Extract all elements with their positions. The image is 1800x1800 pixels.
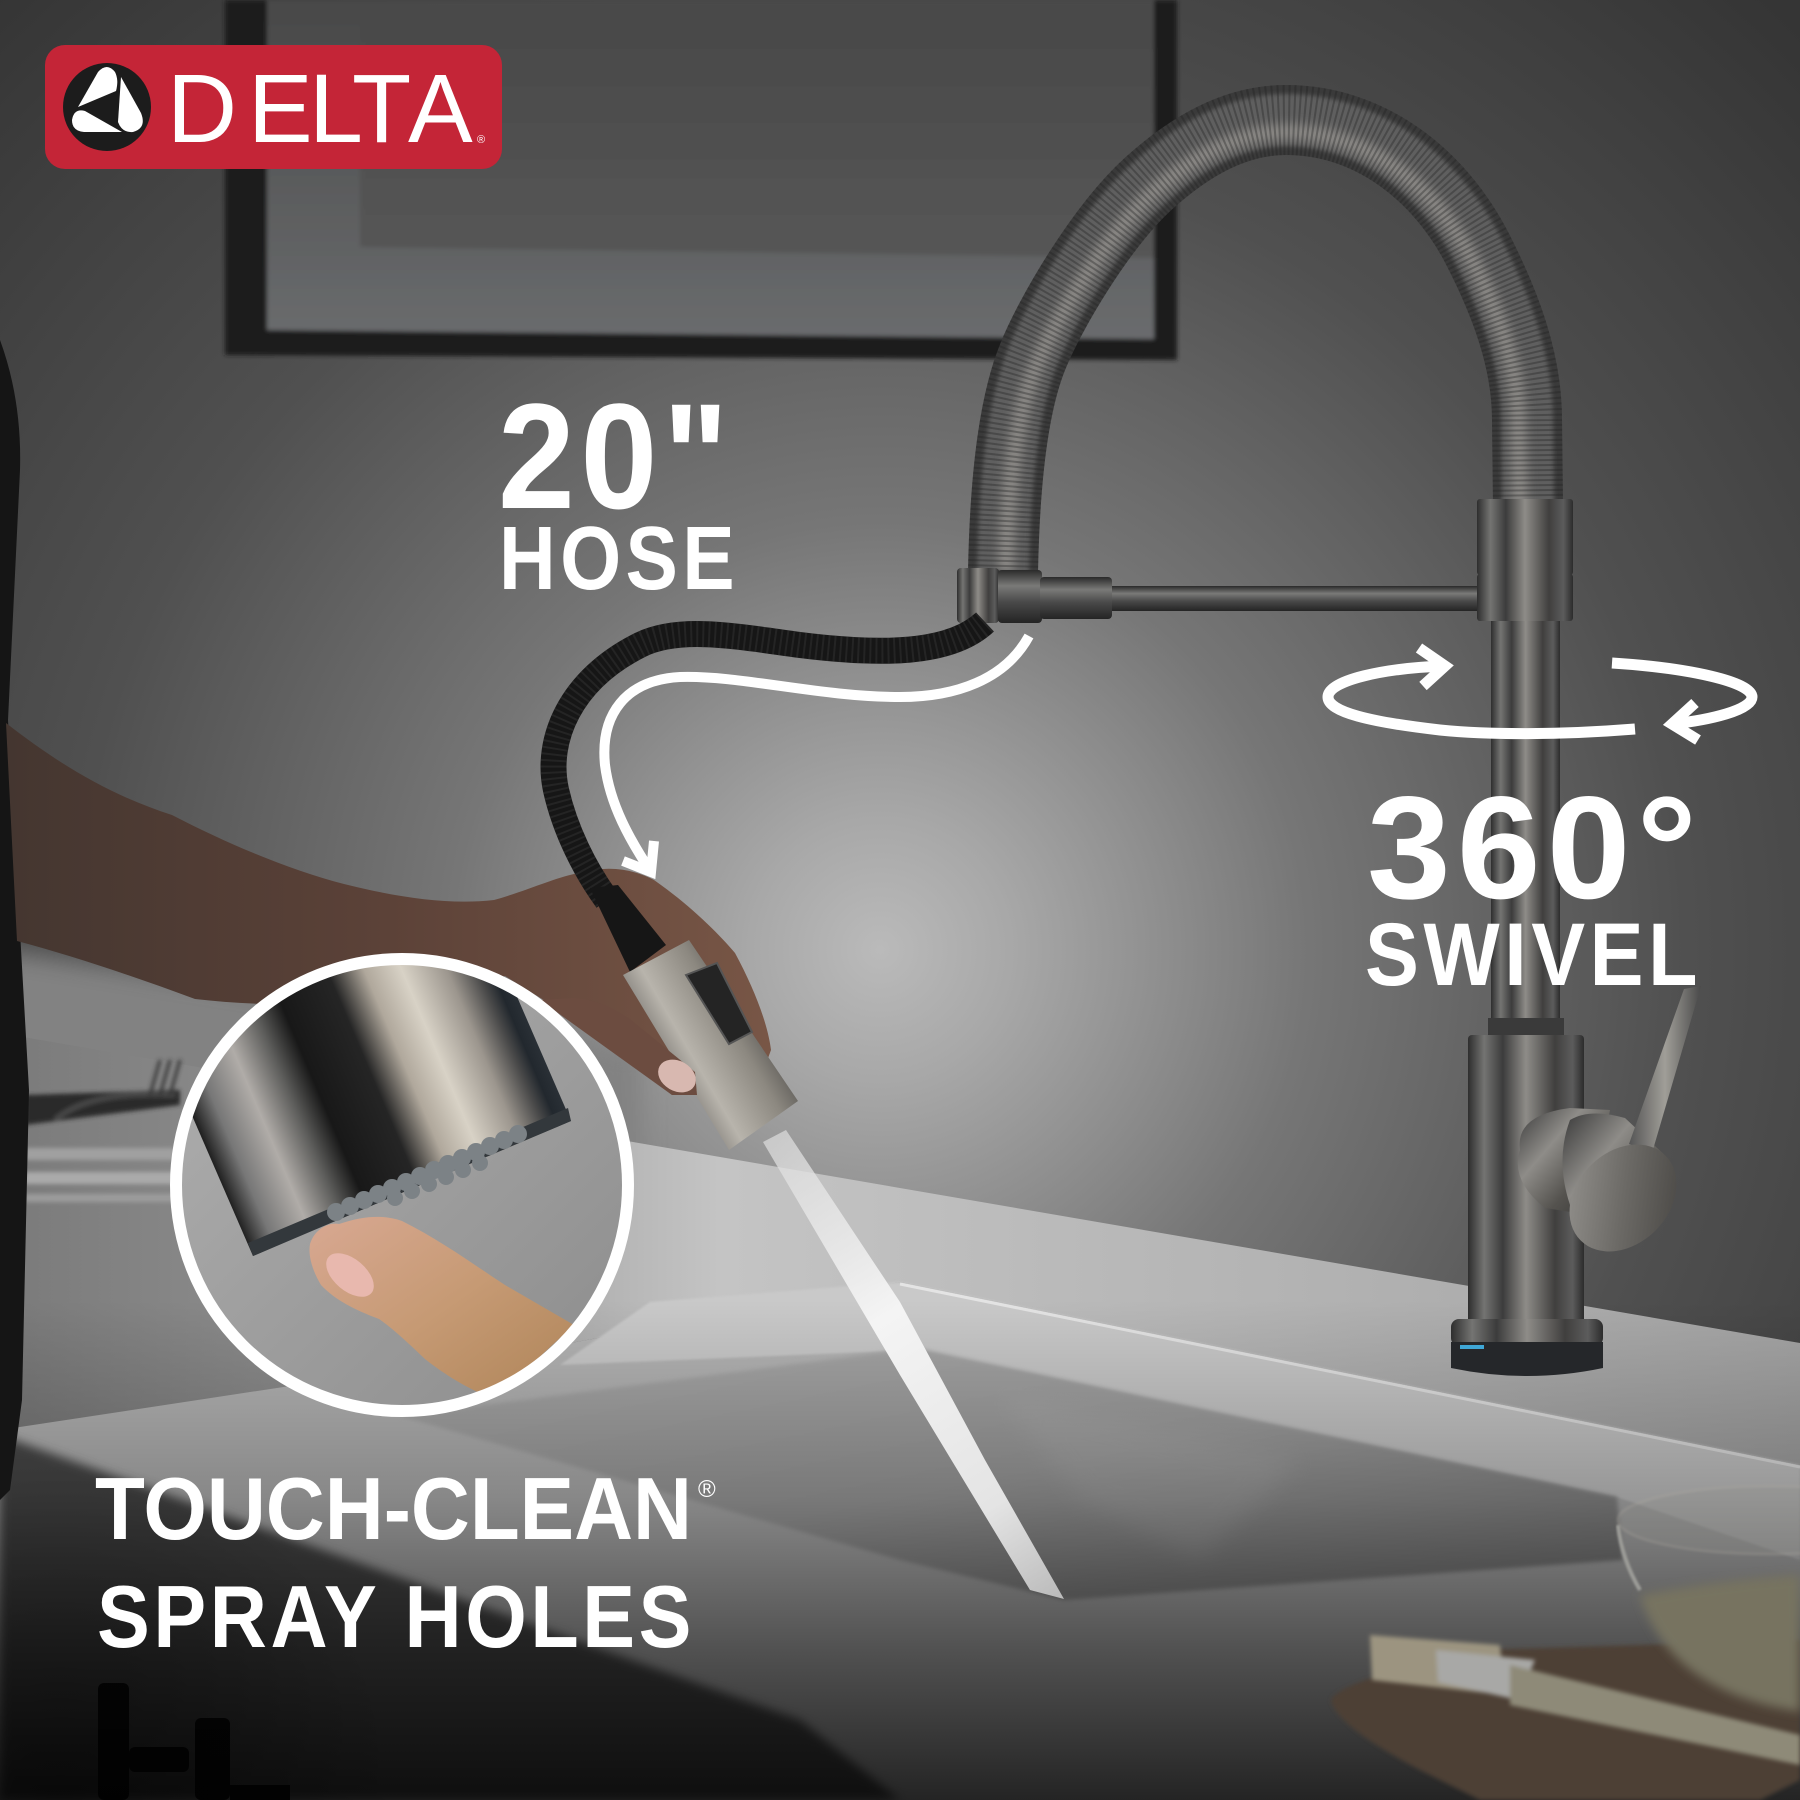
heading: 360 degrees: 360° [1367,766,1703,929]
upper collar [1477,499,1573,575]
connector fitting [1040,577,1112,619]
basin highlight [1152,1491,1234,1534]
neck ring [1488,1018,1564,1038]
countertop [18,1112,1800,1465]
cabinet handles [98,1683,290,1800]
logo emblem [63,63,151,151]
front counter [0,1282,1800,1800]
logo: Delta [45,45,502,169]
arrow: 360 degree swivel left arc [1328,648,1635,734]
sprayer body [623,940,798,1150]
heading: 20 inch: 20" [498,372,734,540]
person's torso [0,340,29,1500]
upper column [1491,621,1560,1041]
inset background [176,959,628,1411]
heading: spray holes: SPRAY HOLES [97,1567,695,1666]
registered mark: ® [477,134,485,146]
braided pull-down hose [554,622,985,900]
horizontal arm [1112,586,1492,611]
pastry brush [1370,1635,1800,1765]
water stream [763,1130,1064,1599]
cabinet below the counter [0,1435,900,1800]
spout clamp [957,568,1042,623]
sink basin [400,1348,1623,1600]
faucet [957,120,1701,1376]
handle lever [1629,986,1701,1153]
cutting board [1331,1640,1800,1800]
heading: swivel: SWIVEL [1365,904,1702,1004]
lower left wall glow [21,942,638,1116]
wall [0,0,1800,1343]
arrow: 360 degree swivel right arc [1612,663,1752,740]
finger [309,1217,574,1399]
spray head close-up [192,965,571,1256]
handle hub [1518,1108,1610,1215]
heading: hose: HOSE [499,509,739,609]
arrowhead: hose [623,841,654,872]
finger nail [318,1245,382,1305]
base ring [1451,1319,1603,1346]
sink rim highlight [900,1284,1800,1467]
registered mark: ® [698,1476,716,1503]
spray head rim [248,1108,571,1256]
handle cylinder [1562,1113,1670,1245]
spray holes [327,1125,527,1221]
lower collar [1477,574,1573,621]
handle cap [1548,1123,1698,1273]
touch indicator light [1460,1345,1484,1349]
black base [1451,1342,1603,1376]
stacked plates and forks [25,1060,180,1202]
inset border [176,959,628,1411]
glass bowl [1618,1486,1800,1712]
pull-down sprayer [590,885,798,1150]
bottom shading [0,1300,1800,1800]
sprayer button [686,963,752,1044]
sink rim [560,1282,1800,1560]
arrowhead: swivel right [1672,703,1698,740]
lower left vignette [0,1545,143,1800]
fingertip holding the sprayer [540,998,702,1099]
logo badge [45,45,502,169]
arrowhead: swivel left [1419,648,1445,686]
picture frame [225,0,1177,360]
arm and hand [6,723,771,1095]
fingernail [652,1053,702,1099]
arrow: hose reach [604,636,1029,872]
flexible spring spout [1003,120,1528,572]
heading: touch-clean: TOUCH-CLEAN [95,1459,692,1558]
inset circle: touch-clean spray holes [170,953,634,1417]
sprayer connector [590,885,666,972]
faucet body [1468,1035,1584,1325]
logo wordmark: DELTA [167,54,473,163]
